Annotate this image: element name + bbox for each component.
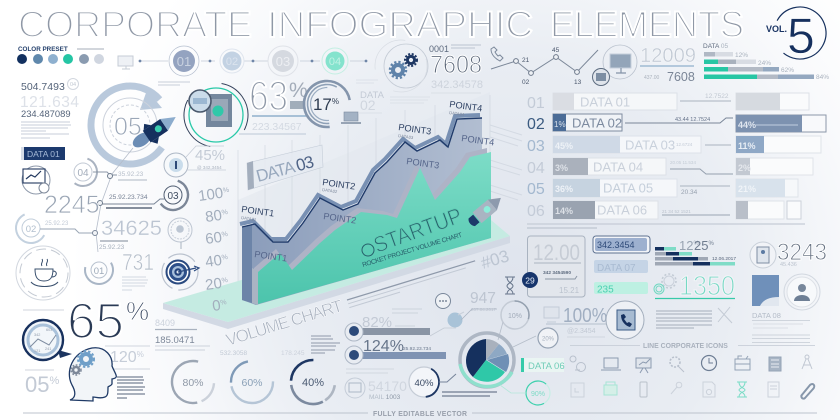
node 02 <box>11 208 97 248</box>
100 to 0 percent axis: % <box>221 209 228 217</box>
row 2: 43.44 12.7524 <box>675 117 710 123</box>
100 to 0 percent axis: 60 <box>204 229 223 248</box>
node 03 <box>98 176 192 214</box>
mail 54170: 54170 <box>368 378 407 394</box>
row 6: 21 34 52 1521 <box>662 209 691 214</box>
1350 stat <box>654 270 735 328</box>
3243 stat <box>750 239 827 268</box>
brain icon <box>168 218 192 249</box>
DATA 05 stacked bars: 24% <box>758 60 771 67</box>
line chart with phone: 21 <box>522 57 530 64</box>
235 tag: 235 <box>597 284 614 296</box>
point labels: DATA03 <box>398 133 414 140</box>
icon: gears <box>390 54 417 78</box>
100 to 0 percent axis: 20 <box>204 275 223 294</box>
color preset: COLOR PRESET <box>18 46 68 53</box>
17 percent radial: % <box>332 97 339 106</box>
icon: printer <box>604 382 617 395</box>
icon: gears in head <box>71 351 94 375</box>
gauge 60 percent <box>220 350 273 403</box>
line chart with phone <box>491 47 598 86</box>
342.3454 tag: 342.3454 <box>597 240 635 250</box>
gauge 80 percent: 80% <box>182 377 204 389</box>
text note <box>311 336 340 353</box>
100 to 0 percent axis: 40 <box>204 252 223 271</box>
row numbers: 05 <box>527 181 545 198</box>
row numbers <box>527 95 545 220</box>
row 5 <box>553 179 798 197</box>
line chart with phone: 13 <box>574 79 582 86</box>
title <box>18 3 744 45</box>
row numbers: 01 <box>527 95 545 112</box>
node 03: 25.92.23.734 <box>109 194 148 201</box>
node 04: 04 <box>77 168 89 179</box>
icon: tools <box>718 307 732 323</box>
icon: phone <box>491 47 503 61</box>
point labels: POINT4 <box>449 99 483 114</box>
7608 stat <box>429 44 483 93</box>
row numbers: 04 <box>527 160 545 177</box>
icon: document <box>750 242 776 268</box>
row numbers: 03 <box>527 138 545 155</box>
100 to 0 percent axis <box>197 184 231 315</box>
65 percent: % <box>137 350 144 359</box>
line chart with phone: 02 <box>522 79 530 86</box>
icon: hourglass <box>737 382 747 397</box>
color preset <box>17 46 104 64</box>
timeline bars: 12 <box>679 238 693 253</box>
timeline bars: 25 <box>694 238 708 253</box>
paragraph <box>117 377 145 398</box>
row 2: 1% <box>554 120 566 129</box>
65 percent <box>23 293 150 397</box>
volume badge: VOL. <box>766 24 787 34</box>
row 5: 20.34 <box>681 189 698 196</box>
icon: pin <box>671 382 682 394</box>
monitor circles and 12009: 12009 <box>640 45 696 67</box>
100 to 0 percent axis: 80 <box>204 207 223 226</box>
icon: paperclip <box>801 384 814 399</box>
row 2: DATA 02 <box>572 116 622 130</box>
DATA 01 tag: DATA 01 <box>27 149 60 159</box>
ring 40 percent <box>404 362 497 402</box>
row 4 <box>553 158 813 175</box>
gauge 40 percent: 178.245 <box>281 350 305 357</box>
100 to 0 percent axis: % <box>222 187 230 195</box>
left slabs <box>242 224 252 303</box>
34625 stat: 25.92.23 <box>99 244 125 251</box>
node 02: 25.92.23 <box>45 221 69 227</box>
speech bubble: 241 <box>45 347 51 351</box>
row 1 <box>553 93 809 110</box>
12.00 panel: 342 3454590 <box>543 270 571 276</box>
947 stat: 207.04.2017 <box>471 307 497 312</box>
1350 stat: 1350 <box>679 270 735 301</box>
monitor circles and 12009: 7608 <box>667 70 695 84</box>
3243 stat: 45.436 <box>780 262 797 268</box>
info icon and 45 percent: 45% <box>195 147 225 164</box>
12.00 panel: 12.00 <box>533 240 580 265</box>
#03 caption: #03 <box>479 246 511 273</box>
point labels: POINT2 <box>323 211 357 226</box>
title: INFOGRAPHIC <box>267 3 533 45</box>
ring 90 percent <box>500 377 554 409</box>
timeline bars: 12.06.2017 <box>712 256 736 262</box>
speech bubble <box>23 320 72 360</box>
node 01 and 731: 01 <box>94 266 104 277</box>
node 03: 03 <box>167 191 179 202</box>
DATA 03 banner <box>247 145 323 190</box>
footer: FULLY EDITABLE VECTOR <box>373 411 467 418</box>
point labels <box>241 99 495 264</box>
17 percent radial: DATA <box>360 90 385 101</box>
63 percent: % <box>289 79 308 102</box>
65 percent: % <box>49 375 59 387</box>
point labels: POINT2 <box>322 177 356 192</box>
progress 82 percent <box>345 309 456 341</box>
row 2: 44% <box>738 120 756 130</box>
step 02: 02 <box>226 56 238 68</box>
numbered data rows <box>527 93 826 228</box>
step 01 <box>169 46 199 76</box>
icon: laptop <box>601 358 621 370</box>
hourglass icon <box>505 277 515 294</box>
row 1: 12.7522 <box>705 93 729 100</box>
65 percent: 05 <box>25 372 49 397</box>
icon: monitor <box>544 307 559 322</box>
ring 40 percent: 40% <box>414 378 434 389</box>
63 percent: 63 <box>249 72 288 119</box>
100 percent stat: @2.3454 <box>567 328 596 335</box>
34625 stat <box>99 216 162 251</box>
100 to 0 percent axis: % <box>221 231 228 239</box>
65 percent: % <box>126 296 149 326</box>
line icons grid <box>570 355 814 399</box>
book tile <box>752 275 779 306</box>
row 2 <box>553 114 826 132</box>
row 3 <box>553 136 821 153</box>
row 3: 11% <box>738 141 756 151</box>
row 6 <box>553 201 801 219</box>
DATA 05 stacked bars: DATA 05 <box>703 43 728 50</box>
mail 54170: MAIL 1003 <box>369 394 401 401</box>
point labels: POINT1 <box>254 249 288 264</box>
info icon and 45 percent: @ 342,3454 <box>197 165 222 170</box>
ring 90 percent: 90% <box>531 391 545 398</box>
step 02 <box>220 49 244 73</box>
row 4: DATA 04 <box>593 160 643 174</box>
platform <box>163 220 510 329</box>
timeline bars <box>655 238 736 266</box>
DATA 05 stacked bars: 62% <box>781 67 794 74</box>
icon: document <box>703 382 715 397</box>
side notes <box>490 125 522 200</box>
icon: laptop <box>341 112 361 123</box>
line chart with phone: 45 <box>552 47 560 54</box>
row 1: DATA 01 <box>580 94 630 110</box>
step 04 <box>322 48 348 74</box>
progress 124 percent: 124% <box>363 338 404 355</box>
row 3: DATA 03 <box>625 138 675 152</box>
ridge <box>254 148 487 300</box>
DATA 05 stacked bars: 12% <box>735 52 748 59</box>
row 5: DATA 05 <box>603 180 653 196</box>
icon: rocket <box>127 107 182 155</box>
7608 stat: 7608 <box>430 51 482 79</box>
left numbers block: 121.634 <box>20 94 80 111</box>
DATA 05 stacked bars: 84% <box>816 74 829 81</box>
row 5: 36% <box>555 184 573 194</box>
2245 stat: 2245 <box>44 191 100 219</box>
100 to 0 percent axis: % <box>220 299 227 307</box>
gauge 40 percent: 40% <box>302 377 324 389</box>
8409 block: 8409 <box>155 318 175 328</box>
monitor circles and 12009 <box>592 45 696 86</box>
ring 20 percent <box>538 328 558 348</box>
icon: calculator <box>769 357 781 371</box>
icon: smartphone <box>640 382 647 397</box>
timeline bars: % <box>693 241 699 247</box>
point labels: POINT3 <box>406 156 440 171</box>
node 04 <box>65 154 147 190</box>
row 4: 20.05 11.534 <box>670 160 696 165</box>
progress 82 percent: 82% <box>362 314 392 331</box>
point labels: DATA02 <box>322 187 338 194</box>
DATA 05 stacked bars <box>703 43 829 81</box>
icon: gear tool <box>670 357 684 372</box>
navy line <box>240 115 482 242</box>
progress 124 percent <box>345 338 446 373</box>
3243 stat: 3243 <box>777 239 827 266</box>
8409 block: 185.0471 <box>155 335 195 346</box>
34625 stat: 34625 <box>101 216 162 240</box>
row numbers: 06 <box>527 203 545 220</box>
icon: chart clock <box>22 166 50 194</box>
speech bubble: 121 <box>34 349 40 353</box>
65 percent: 120 <box>110 349 137 366</box>
gauge 60 percent: 60% <box>241 377 263 389</box>
node 01 and 731 <box>80 249 154 290</box>
100 to 0 percent axis: 0 <box>211 297 222 315</box>
step 03: 03 <box>276 54 290 69</box>
monitor circles and 12009: 437.00 <box>644 75 660 81</box>
point labels: POINT4 <box>461 133 495 148</box>
row numbers: 02 <box>527 116 545 133</box>
step timeline <box>118 46 367 76</box>
speech bubble: 603 <box>46 328 52 332</box>
ring 20 percent: 20% <box>542 336 555 342</box>
mail 54170 <box>345 378 407 401</box>
head with speech bubble <box>23 320 145 401</box>
100 to 0 percent axis: % <box>221 254 228 262</box>
row 3: 45% <box>555 141 573 151</box>
icon: notebook <box>571 383 584 397</box>
DATA 07 tag: DATA 07 <box>597 263 636 274</box>
node 01 and 731: 731 <box>122 249 154 275</box>
17 percent radial <box>302 79 430 129</box>
caption lines <box>347 261 477 308</box>
point labels: POINT1 <box>241 204 275 219</box>
DATA 08 note: DATA 08 <box>752 311 781 320</box>
title: ELEMENTS <box>550 3 744 45</box>
row 6: DATA 06 <box>597 202 647 218</box>
step 03 <box>268 46 298 76</box>
row 4: 2% <box>738 163 751 173</box>
DATA 07 tag <box>594 260 648 274</box>
left numbers block: 234.487089 <box>21 108 71 119</box>
rocket cycle 05: 05 <box>114 113 142 141</box>
7608 stat: 342.34578 <box>431 79 483 91</box>
row note <box>527 223 805 225</box>
row 6: 14% <box>555 206 573 216</box>
235 tag <box>594 282 648 296</box>
STARTUP label: STARTUP <box>370 203 465 258</box>
icon: clipboard <box>768 382 779 397</box>
back area <box>242 118 491 305</box>
DATA 03 banner: DATA 03 <box>254 152 316 186</box>
100 to 0 percent axis: 100 <box>197 185 224 205</box>
volume badge <box>764 0 836 69</box>
target icon <box>162 254 199 290</box>
icon: address book <box>606 301 644 339</box>
gauge 80 percent <box>169 358 217 406</box>
65 percent: 65 <box>67 293 124 349</box>
icon: monitor <box>118 56 133 69</box>
left numbers block <box>20 78 80 194</box>
person circle <box>784 274 820 310</box>
100 percent stat <box>544 301 644 339</box>
speech bubble: 342 <box>34 333 40 337</box>
title: CORPORATE <box>18 3 252 45</box>
342.3454 tag <box>593 236 650 253</box>
badge 29: 29 <box>525 276 535 286</box>
point labels: DATA04 <box>449 110 465 117</box>
12.00 panel <box>522 236 585 297</box>
node 04: 35.92.23 <box>118 171 144 178</box>
chat and globe icons <box>436 294 497 328</box>
DATA 08 note <box>752 311 810 342</box>
gears circle <box>375 40 428 92</box>
point labels: POINT3 <box>398 122 432 137</box>
STARTUP label: ROCKET PROJECT VOLUME CHART <box>362 232 463 269</box>
DATA 06 tag <box>521 358 565 372</box>
gauge 40 percent <box>281 350 342 411</box>
3D volume chart <box>163 92 522 350</box>
12.00 panel: 15.21 <box>559 286 580 295</box>
rocket cycle 05 <box>76 71 184 252</box>
63 percent <box>239 72 308 134</box>
line icons heading: LINE CORPORATE ICONS <box>643 343 728 350</box>
947 stat: 947 <box>470 290 496 307</box>
63 percent: 223.34567 <box>252 121 302 133</box>
target strategy icon <box>158 78 253 152</box>
step 01: 01 <box>177 54 191 69</box>
ring 10 percent <box>498 301 529 340</box>
step 04: 04 <box>329 56 341 68</box>
8409 block <box>155 318 210 350</box>
chart wall <box>238 92 490 300</box>
ring 10 percent: 10% <box>508 313 522 320</box>
info icon and 45 percent <box>164 146 226 177</box>
icon: briefcase <box>735 356 750 370</box>
coffee icon <box>16 246 70 300</box>
100 to 0 percent axis: % <box>221 277 228 285</box>
row 4: 3% <box>555 163 568 173</box>
row 5: 21% <box>738 184 756 194</box>
timeline bars: % <box>708 241 714 247</box>
gauge 60 percent: 532.3058 <box>220 350 247 357</box>
progress 124 percent: 25.92.23.734 <box>403 346 431 352</box>
icon: people <box>570 356 586 372</box>
17 percent radial: 02 <box>360 97 376 113</box>
left numbers block: 04 <box>70 82 76 88</box>
left numbers block: 504.7493 <box>21 81 65 93</box>
pie chart <box>460 333 536 387</box>
VOLUME CHART caption: VOLUME CHART <box>224 296 345 350</box>
volume badge: 5 <box>787 8 815 64</box>
icon: compass <box>802 355 812 369</box>
STARTUP label <box>362 203 465 269</box>
teal area <box>258 152 491 304</box>
chart rocket <box>466 192 505 229</box>
icon: presentation <box>636 358 651 373</box>
node 02: 02 <box>26 224 36 235</box>
17 percent radial: 17 <box>313 95 332 114</box>
icon: clock <box>702 356 716 370</box>
row 3: 12.6724 <box>676 142 693 147</box>
7608 stat: 0001 <box>429 44 449 54</box>
DATA 06 tag: DATA 06 <box>528 361 565 372</box>
point labels: DATA01 <box>241 215 257 222</box>
100 percent stat: 100% <box>563 304 607 327</box>
